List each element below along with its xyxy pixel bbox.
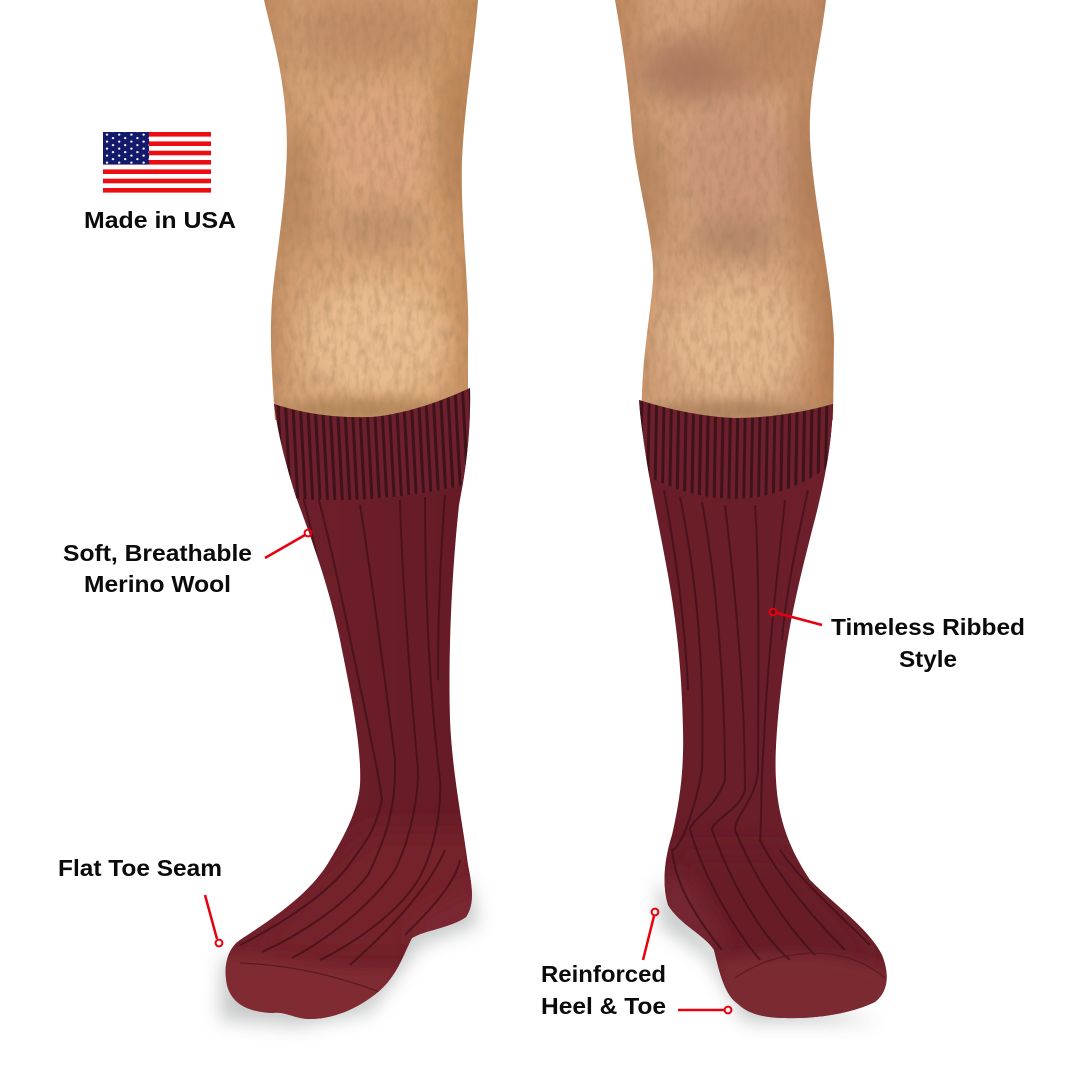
usa flag <box>103 132 211 193</box>
callout: flat toe seam <box>58 855 222 946</box>
right foot tone <box>660 850 895 1030</box>
right leg <box>615 0 834 420</box>
callout: reinforced heel and toe: Heel & Toe <box>541 993 666 1019</box>
left sock <box>226 388 472 1019</box>
right sock <box>639 400 887 1018</box>
right knee shading <box>634 0 825 423</box>
callout: reinforced heel and toe: Reinforced <box>541 961 666 987</box>
callout: reinforced heel and toe <box>541 909 731 1019</box>
left sock ribs <box>240 495 460 965</box>
foot shadows <box>220 880 880 1026</box>
left foot tone <box>215 830 480 1030</box>
callout: ribbed style: Timeless Ribbed <box>831 614 1025 640</box>
left leg <box>264 0 478 420</box>
callout: flat toe seam: Flat Toe Seam <box>58 855 222 881</box>
right sock ribs <box>664 490 870 960</box>
label: made in usa: Made in USA <box>84 207 236 233</box>
callout: merino wool <box>63 530 311 597</box>
right cuff <box>639 400 833 499</box>
left knee shading <box>280 0 468 422</box>
callout: ribbed style <box>770 609 1025 672</box>
callout: merino wool: Soft, Breathable <box>63 540 252 566</box>
callout: merino wool: Merino Wool <box>84 571 231 597</box>
callout: ribbed style: Style <box>899 646 957 672</box>
left cuff <box>274 388 470 500</box>
